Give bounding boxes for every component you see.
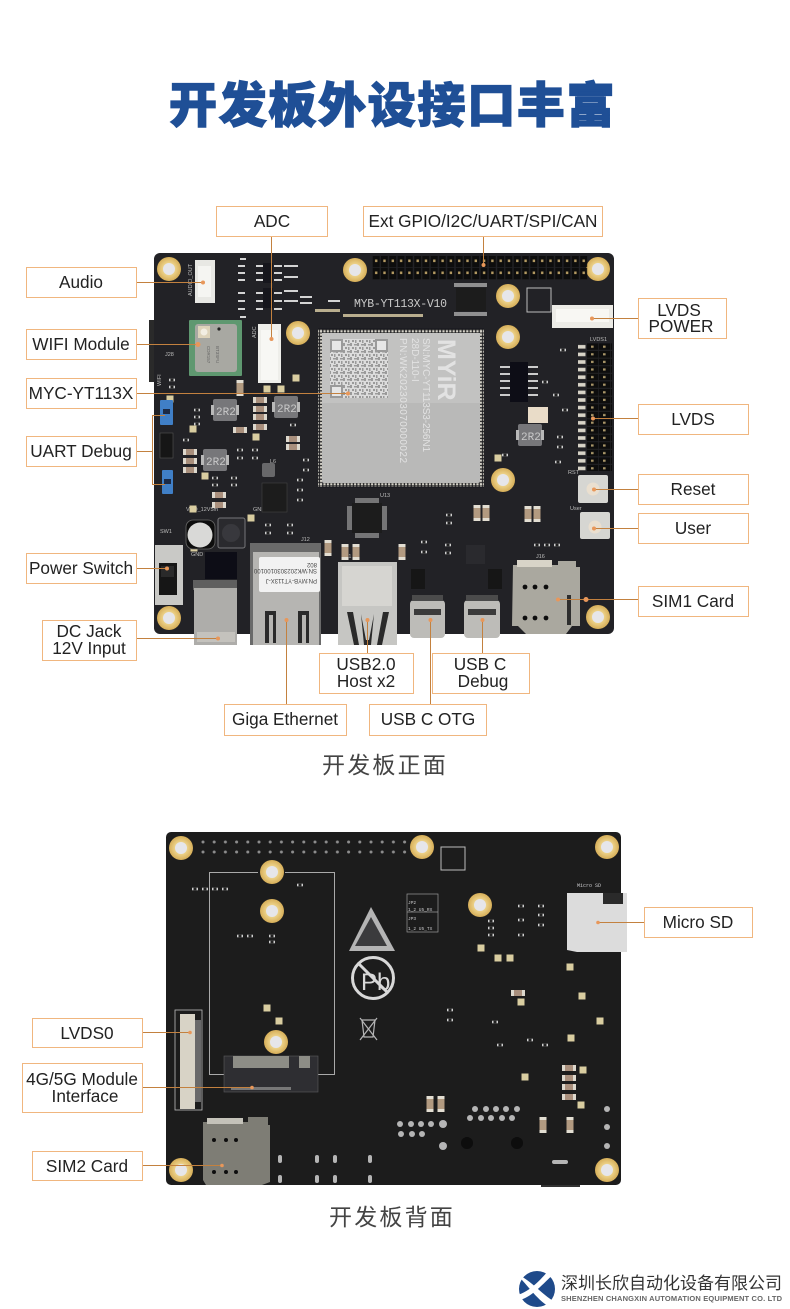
- leader line: Micro SD: [598, 922, 644, 924]
- diode D1: [205, 552, 237, 579]
- FPC connector: [175, 1010, 202, 1110]
- board edge connector on left: [149, 320, 156, 382]
- back mounting holes: [169, 835, 619, 1182]
- WiFi module: [189, 320, 242, 376]
- leader line: DC jack: [136, 638, 218, 640]
- IC top right: [454, 283, 487, 316]
- title: 开发板外设接口丰富: [169, 80, 616, 133]
- power inductors: 2R2: [216, 407, 236, 419]
- leader line: LVDS: [593, 418, 638, 420]
- leader line: power switch: [136, 568, 167, 570]
- label: 4G/5G Module Interface: Interface: [52, 1086, 118, 1106]
- label: LVDS0: [32, 1018, 142, 1048]
- silk labels: L6: [270, 459, 276, 465]
- leader line: Ethernet: [286, 620, 288, 704]
- blue jumpers: [160, 400, 173, 494]
- label: ADC: [216, 206, 328, 236]
- U14 chip: [262, 483, 287, 512]
- power inductors: 2R2: [277, 404, 297, 416]
- label: USB C OTG: USB C OTG: [381, 709, 475, 729]
- jumper table: JP2: [408, 900, 416, 906]
- power switch: [155, 545, 183, 605]
- jumper table: JP3: [408, 916, 416, 922]
- silk labels: GND: [253, 507, 265, 513]
- label: LVDS: [638, 404, 748, 434]
- Micro SD slot: [567, 883, 627, 952]
- reset and user buttons: [578, 475, 610, 539]
- label: USB C Debug: USB C: [454, 654, 506, 674]
- jumper table: 1_2 U5_TX: [408, 926, 433, 932]
- jumper table: 1_2 U5_RX: [408, 907, 433, 913]
- label: Giga Ethernet: [224, 704, 346, 736]
- back header holes: [198, 838, 410, 858]
- leader line: User: [594, 528, 638, 530]
- U13 chip: [347, 498, 387, 538]
- label: USB2.0 Host: [320, 654, 414, 694]
- label: Micro SD: [644, 908, 752, 938]
- WiFi module: CDR157: [206, 346, 211, 364]
- mounting holes: [157, 257, 610, 630]
- front board photo: [149, 253, 614, 645]
- silk labels: J10: [426, 595, 435, 601]
- silk labels: LVDS1: [590, 337, 607, 343]
- icon: logo mark: [517, 1269, 558, 1308]
- silk labels: User: [570, 506, 582, 512]
- leader line: USB A: [366, 620, 368, 653]
- label: Audio: [26, 268, 136, 298]
- silk square back: [441, 847, 465, 870]
- silk labels: AUDIO_OUT: [188, 263, 194, 296]
- label: USB C Debug: [432, 654, 530, 694]
- small white connector: [528, 407, 548, 423]
- inductor L1: [218, 518, 245, 548]
- label: Reset: Reset: [671, 479, 716, 499]
- module label text: [397, 338, 460, 463]
- leader line: UART bracket: [136, 416, 165, 484]
- label: Audio: Audio: [59, 272, 103, 292]
- USB C OTG port: [410, 595, 445, 638]
- label: UART Debug: [26, 436, 136, 466]
- silk labels: GND: [191, 552, 203, 558]
- electrolytic capacitor: [186, 520, 215, 549]
- M.2 slot: [224, 1056, 318, 1092]
- label: USB2.0 Host: USB2.0: [336, 654, 396, 674]
- Ethernet jack: PN:MYB-YT113X-J: [266, 577, 317, 583]
- silk labels: J25: [481, 595, 490, 601]
- SoM module: [318, 328, 484, 488]
- front PCB: [154, 253, 614, 634]
- label: SIM1 Card: [638, 586, 748, 616]
- leader line: LVDS0: [142, 1032, 190, 1034]
- leader line: WIFI: [136, 344, 198, 346]
- SIM2 slot: [203, 1117, 270, 1185]
- test pads and passives left: [166, 374, 332, 556]
- company English name: SHENZHEN CHANGXIN AUTOMATION EQUIPMENT CO. LTD: [561, 1294, 783, 1303]
- label: User: User: [675, 518, 711, 538]
- ADC connector: [258, 324, 281, 383]
- back through-hole clusters: [278, 1106, 610, 1183]
- silk labels: SW1: [160, 529, 172, 535]
- caption: back: 开发板背面: [329, 1204, 455, 1230]
- leader line: ADC: [270, 236, 272, 339]
- power inductors: [201, 396, 544, 471]
- module label text: PN:WK202303070000022: [397, 338, 408, 463]
- leader line: USB C Debug: [482, 620, 484, 653]
- icon: ESD warning triangle: [349, 907, 395, 951]
- WiFi module: BT3SFU: [215, 346, 220, 363]
- diodes above USB C: [411, 545, 502, 589]
- leader line: Audio: [136, 282, 203, 284]
- back leader dots: [188, 921, 600, 1167]
- back PCB: [166, 832, 621, 1185]
- label: Power Switch: [26, 554, 136, 584]
- label: Ext GPIO: Ext GPIO/I2C/UART/SPI/CAN: [369, 211, 597, 231]
- driver chips top: [238, 258, 423, 318]
- label: DC Jack: DC Jack: [57, 621, 122, 641]
- leader line: 4G/5G: [142, 1086, 252, 1088]
- USB C Debug port: [464, 595, 500, 638]
- label: ADC: ADC: [254, 211, 290, 231]
- icon: lead-free mark: Pb: [361, 969, 390, 996]
- leader line: SIM2: [142, 1164, 222, 1166]
- label: 4G/5G Module Interface: 4G/5G Module: [26, 1069, 138, 1089]
- silk labels: U13: [380, 493, 390, 499]
- module label text: MYiR: [432, 339, 460, 401]
- back board photo: [166, 832, 627, 1187]
- leader line: LVDS power: [592, 318, 638, 320]
- leader line: Reset: [594, 488, 638, 490]
- label: Ext GPIO: [364, 206, 602, 236]
- label: Giga Ethernet: Giga Ethernet: [232, 709, 338, 729]
- label: UART Debug: UART Debug: [30, 441, 132, 461]
- label: 4G/5G Module Interface: [22, 1064, 142, 1112]
- QR code: [330, 339, 388, 398]
- label: SIM1 Card: SIM1 Card: [652, 591, 734, 611]
- power inductors: 2R2: [206, 457, 226, 469]
- silk labels: J12: [301, 537, 310, 543]
- edge connector bottom: [541, 1185, 580, 1187]
- module label text: 28D-110-I: [409, 338, 420, 382]
- leader line: USB C OTG: [430, 620, 432, 704]
- icon: WEEE bin: [360, 1018, 377, 1040]
- label: User: [638, 514, 748, 544]
- jumper table: [407, 894, 438, 932]
- LVDS power connector: [552, 305, 613, 328]
- module outline: [210, 872, 334, 1074]
- LVDS header: [578, 343, 612, 471]
- label: SIM2 Card: [32, 1152, 142, 1180]
- label: DC Jack: [42, 620, 136, 660]
- inductor L6: [262, 463, 275, 477]
- audio connector: [195, 260, 215, 303]
- leader line: GPIO: [482, 236, 484, 265]
- label: Micro SD: Micro SD: [663, 912, 733, 932]
- label: Reset: [638, 474, 748, 504]
- label: USB2.0 Host: Host x2: [337, 671, 395, 691]
- SIM1 slot: [512, 560, 580, 634]
- label: WIFI Module: [26, 330, 136, 360]
- silk labels: [157, 263, 607, 601]
- label: LVDS POWER: LVDS: [657, 300, 701, 320]
- label: MYC-YT113X: MYC-YT113X: [29, 383, 134, 403]
- label: SIM2 Card: SIM2 Card: [46, 1156, 128, 1176]
- silk labels: J11: [343, 554, 351, 560]
- label: LVDS POWER: POWER: [649, 316, 713, 336]
- caption: front: 开发板正面: [322, 752, 448, 778]
- module label text: SN:MYC-YT113S3-256N1: [420, 338, 431, 452]
- board marking: MYB-YT113X-V10: [354, 298, 447, 311]
- silk labels: WIFI: [157, 374, 163, 386]
- U19 chip: [500, 362, 538, 402]
- Micro SD slot: Micro SD: [577, 883, 601, 889]
- back passives: [192, 884, 604, 1133]
- back through-hole black pads: [461, 1137, 523, 1149]
- company name: 深圳长欣自动化设备有限公司: [561, 1274, 782, 1293]
- label: USB C OTG: [370, 704, 486, 736]
- DC jack: [193, 580, 237, 645]
- USB A jack: [338, 562, 397, 645]
- silk labels: ADC: [252, 326, 258, 338]
- leader line: SoM: [136, 392, 348, 394]
- label: Power Switch: Power Switch: [29, 558, 133, 578]
- silk labels: J16: [536, 554, 545, 560]
- icon: lead-free mark: [352, 958, 394, 998]
- leader line: SIM1: [558, 598, 638, 600]
- silk labels: RST: [568, 470, 580, 476]
- label: LVDS: LVDS: [671, 409, 715, 429]
- label: USB C Debug: Debug: [458, 671, 508, 691]
- right side small capacitors: [342, 349, 568, 560]
- label: LVDS POWER: [638, 298, 726, 338]
- silk square: [527, 288, 551, 312]
- Ethernet jack: SN:WK2023030100100: [253, 567, 317, 573]
- label: DC Jack: 12V Input: [52, 638, 126, 658]
- Ethernet jack: 802: [306, 561, 317, 567]
- company logo: [517, 1269, 783, 1308]
- silk labels: J28: [165, 352, 174, 358]
- GPIO pin header: [372, 256, 588, 280]
- Ethernet jack: [250, 543, 321, 645]
- label: MYC-YT113X: [26, 378, 136, 408]
- label: LVDS0: LVDS0: [60, 1023, 114, 1043]
- label: WIFI Module: WIFI Module: [32, 334, 130, 354]
- leader dots: [165, 263, 596, 640]
- power inductors: 2R2: [521, 432, 541, 444]
- silk labels: VDD_12V5m: [186, 507, 219, 513]
